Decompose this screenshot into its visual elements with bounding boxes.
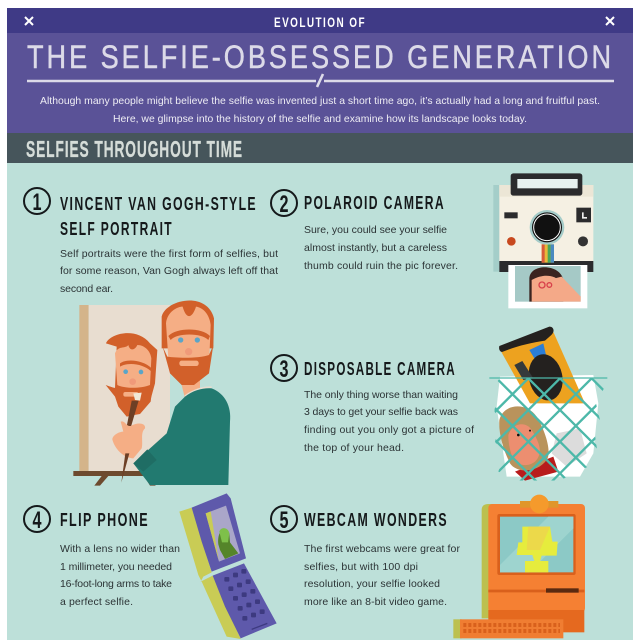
item 1: van gogh text: for some reason, Van Gogh always left off that [60,265,278,277]
page background [7,163,633,640]
item 1: van gogh text: VINCENT VAN GOGH-STYLE [60,194,257,214]
item 1: van gogh text: second ear. [60,283,113,295]
item 3: disposable text: DISPOSABLE CAMERA [304,359,456,379]
item 2: polaroid text: 2 [280,191,288,218]
icon: right cross [606,17,614,25]
item 5: webcam text: WEBCAM WONDERS [304,510,448,530]
item 4: flip phone text: 16-foot-long arms to take [60,578,172,590]
illustration: flip phone [179,493,277,639]
item 1: van gogh text: 1 [32,189,42,216]
item 5: webcam text: selfies, but with 100 dpi [304,561,418,573]
item 3: disposable text: the top of your head. [304,442,404,454]
item 2: polaroid text [271,190,458,272]
item 1: van gogh text: SELF PORTRAIT [60,219,173,239]
icon: left cross [25,17,33,25]
title rule [27,74,614,87]
item 1: van gogh text: Self portraits were the first form of selfies, but [60,248,278,260]
item 5: webcam text [271,506,460,608]
intro text [40,96,600,125]
item 4: flip phone text: a perfect selfie. [60,596,133,608]
section heading [7,133,633,163]
illustration: webcam computer [453,495,585,638]
header banner [7,8,633,133]
item 3: disposable text: finding out you only got a picture of [304,424,474,436]
illustration: polaroid camera [493,173,593,308]
eyebrow heading: EVOLUTION OF [274,14,366,30]
intro text: Although many people might believe the selfie was invented just a short time ago, it’s actually had a long and fruitful past. [40,96,600,107]
item 5: webcam text: resolution, your selfie looked [304,578,440,590]
item 5: webcam text: 5 [280,507,288,534]
section heading: SELFIES THROUGHOUT TIME [26,136,243,162]
item 3: disposable text: The only thing worse than waiting [304,389,458,401]
item 2: polaroid text: almost instantly, but a careless [304,242,447,254]
item 3: disposable text: 3 days to get your selfie back was [304,406,458,418]
item 4: flip phone text: With a lens no wider than [60,543,180,555]
item 4: flip phone text: 1 millimeter, you needed [60,561,172,573]
item 4: flip phone text: 4 [32,507,42,534]
item 2: polaroid text: thumb could ruin the pic forever. [304,260,458,272]
item 5: webcam text: more like an 8-bit video game. [304,596,447,608]
item 3: disposable text: 3 [280,356,288,383]
illustration: van gogh painting self portrait [73,300,230,486]
intro text: Here, we glimpse into the history of the selfie and examine how its landscape looks today. [113,114,527,125]
item 1: van gogh text [24,188,278,295]
item 2: polaroid text: Sure, you could see your selfie [304,224,447,236]
item 5: webcam text: The first webcams were great for [304,543,460,555]
item 2: polaroid text: POLAROID CAMERA [304,193,445,213]
illustration: disposable camera in basket [489,326,608,481]
item 4: flip phone text: FLIP PHONE [60,510,149,530]
item 3: disposable text [271,355,474,454]
item 4: flip phone text [24,506,180,608]
